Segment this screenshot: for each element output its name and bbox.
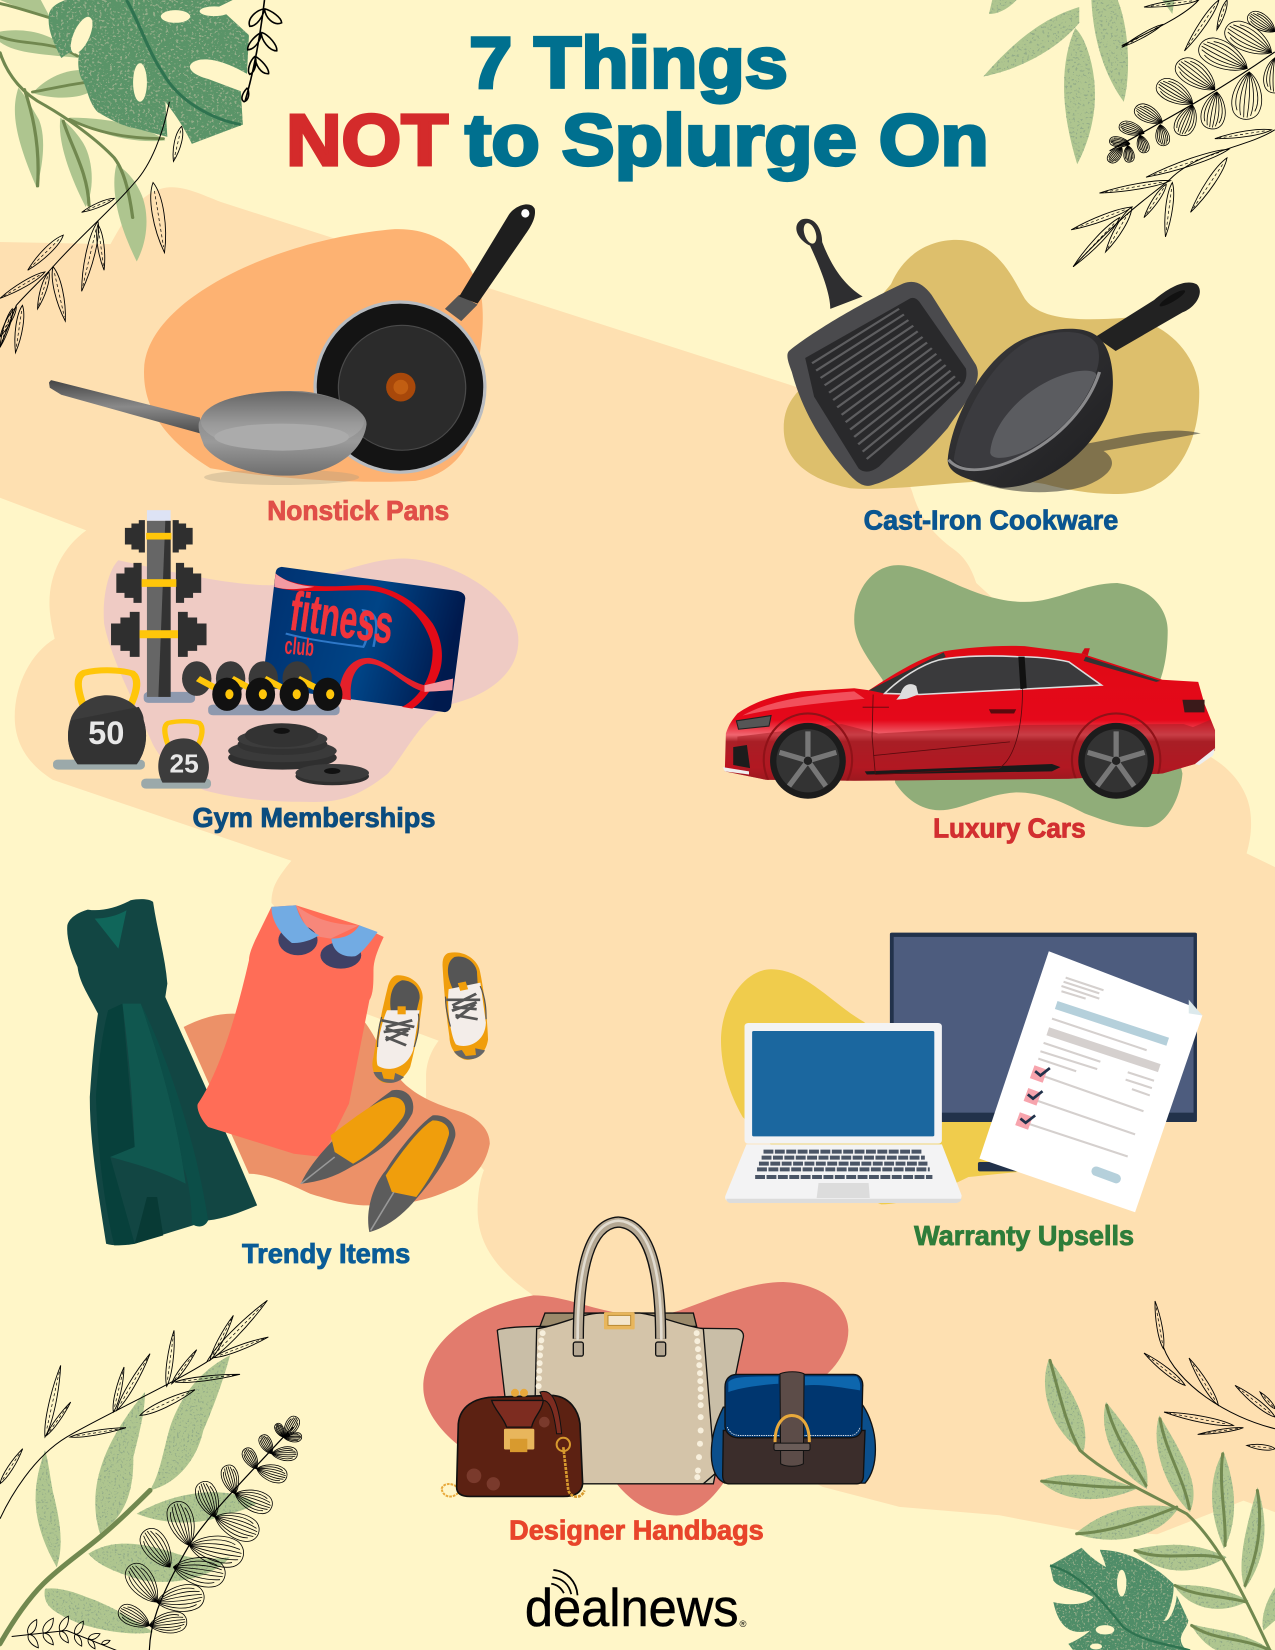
light green foliage xyxy=(983,0,1174,164)
label: Cast-Iron Cookware: Cast-Iron Cookware xyxy=(864,504,1118,535)
icon: steel pan xyxy=(49,380,367,485)
icon: 50 kettlebell xyxy=(53,670,146,770)
card text: club: club xyxy=(284,633,315,662)
label: Luxury Cars: Luxury Cars xyxy=(933,813,1086,844)
blob: orange xyxy=(144,229,483,482)
leaves: bottom-left corner xyxy=(0,1298,302,1650)
icon: right flat shoe xyxy=(368,1115,455,1232)
panel: trendy items xyxy=(67,899,505,1245)
icon: membership card xyxy=(262,567,465,712)
kettlebell number 25: 25 xyxy=(169,748,199,778)
panel: warranty upsells xyxy=(721,933,1197,1204)
icon: weight plates xyxy=(228,723,369,785)
monstera leaf xyxy=(1050,1548,1190,1650)
card text: fitness: fitness xyxy=(287,580,397,656)
tote pearl studs xyxy=(536,1330,704,1480)
light green foliage xyxy=(0,0,165,261)
logo registered mark: ® xyxy=(740,1619,747,1630)
dashed line sprig xyxy=(0,102,185,353)
icon: green dress xyxy=(67,899,257,1245)
leaf stems xyxy=(1042,1360,1270,1650)
icon: dumbbells xyxy=(182,661,342,715)
icon: brown bag xyxy=(442,1389,584,1497)
panel: cast-iron cookware xyxy=(784,219,1201,494)
label: Nonstick Pans: Nonstick Pans xyxy=(267,495,449,526)
logo signal arcs xyxy=(551,1570,578,1595)
icon: weight rack xyxy=(111,510,207,703)
icon: beige tote xyxy=(497,1221,743,1484)
label: Gym Memberships: Gym Memberships xyxy=(193,802,436,833)
icon: blue bag xyxy=(711,1372,875,1484)
icon: 25 kettlebell xyxy=(141,721,211,789)
blob: pink xyxy=(104,559,518,802)
black vine sprig xyxy=(242,0,282,102)
icon: red coupe xyxy=(723,646,1220,806)
striped sprig xyxy=(115,1414,302,1650)
blob: red xyxy=(423,1282,848,1515)
icon: skillet xyxy=(948,283,1201,492)
panel: gym memberships xyxy=(53,510,518,802)
light green foliage xyxy=(1040,1359,1275,1650)
kettlebell number 50: 50 xyxy=(88,714,124,751)
checkbox 1 xyxy=(1030,1065,1050,1083)
checkbox 3 xyxy=(1015,1112,1035,1130)
blob: green xyxy=(854,565,1182,827)
leaves: bottom-right corner xyxy=(1040,1301,1275,1650)
dashed sprig xyxy=(0,1298,270,1650)
checkbox 2 xyxy=(1024,1088,1043,1106)
icon: right sneaker xyxy=(424,948,505,1062)
monstera leaf xyxy=(49,0,249,144)
title word NOT: NOT xyxy=(286,100,448,181)
title line 1: 7 Things xyxy=(469,22,788,103)
icon: wall monitor xyxy=(890,933,1197,1171)
blob: yellow xyxy=(721,969,1018,1204)
blob: gold xyxy=(784,240,1199,494)
panel: nonstick pans xyxy=(49,204,535,485)
label: Trendy Items: Trendy Items xyxy=(242,1238,410,1269)
icon: coral top xyxy=(197,905,384,1157)
icon: black nonstick pan xyxy=(313,204,535,474)
panel: luxury cars xyxy=(723,565,1220,827)
label: Warranty Upsells: Warranty Upsells xyxy=(914,1220,1134,1251)
label: Designer Handbags: Designer Handbags xyxy=(509,1515,764,1546)
icon: laptop xyxy=(725,1023,962,1203)
dashed sprigs xyxy=(1070,0,1275,269)
icon: warranty document xyxy=(979,951,1202,1212)
blob: salmon xyxy=(184,1014,490,1205)
title line 2: to Splurge On xyxy=(465,100,989,181)
panel: designer handbags xyxy=(423,1221,875,1515)
leaves: top-left corner xyxy=(0,0,282,353)
icon: left flat shoe xyxy=(301,1090,413,1184)
light green foliage xyxy=(36,1355,257,1633)
title xyxy=(286,22,989,181)
striped sprig xyxy=(1105,8,1275,165)
icon: grill pan xyxy=(787,219,978,486)
logo wordmark: dealnews xyxy=(525,1579,738,1638)
icon: left sneaker xyxy=(372,975,423,1083)
thick stem xyxy=(0,1490,150,1644)
dashed sprig xyxy=(1142,1301,1275,1451)
logo: dealnews xyxy=(525,1570,747,1638)
leaves: top-right corner xyxy=(983,0,1275,269)
